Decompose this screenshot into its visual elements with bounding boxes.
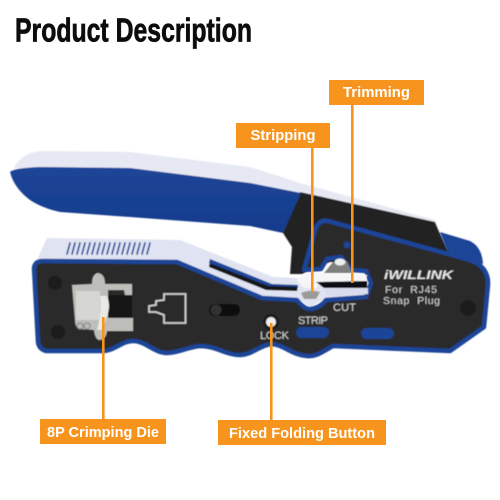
rear tool edge (440, 232, 483, 264)
small blue dot on head (344, 242, 350, 248)
body white top surface (36, 238, 367, 307)
callout line: folding button (270, 323, 273, 420)
cutter insert (324, 261, 352, 273)
sliding switch (209, 304, 240, 316)
label: Trimming (329, 80, 424, 105)
upper handle top surface (14, 151, 440, 232)
blue buttons (296, 327, 329, 338)
tool printed labels: For RJ45 (385, 284, 437, 296)
tool printed labels: iWILLINK (384, 268, 455, 282)
jaw white blade (296, 273, 367, 288)
upper handle black head (283, 192, 470, 274)
label: 8P Crimping Die (40, 419, 166, 444)
tool printed labels: LOCK (260, 330, 290, 342)
lock button (263, 314, 279, 330)
tool printed labels: STRIP (298, 315, 328, 327)
tool printed labels: Snap Plug (383, 295, 440, 307)
callout line: stripping (311, 148, 314, 292)
label: Stripping: Stripping (250, 127, 316, 144)
label: Fixed Folding Button: Fixed Folding Button (229, 425, 375, 442)
8P crimping die (72, 273, 133, 340)
slot blue edge (209, 259, 298, 287)
label: 8P Crimping Die: 8P Crimping Die (47, 424, 159, 441)
slot on body (209, 260, 298, 291)
crimping tool (10, 151, 488, 356)
body black face with blue outline (34, 221, 488, 356)
label: Stripping (236, 123, 330, 148)
label: Trimming: Trimming (343, 84, 410, 101)
lower jaw lavender (324, 288, 368, 296)
strip pocket (301, 291, 320, 299)
vent slits (67, 243, 150, 254)
label: Fixed Folding Button (218, 420, 386, 445)
slider knob (210, 304, 222, 316)
cutter pin (334, 258, 346, 266)
screws (48, 276, 62, 290)
title: Product Description (15, 12, 252, 48)
jaw dark channel (316, 281, 367, 288)
callout line: crimping die (102, 317, 105, 419)
tool printed labels: CUT (333, 302, 356, 314)
RJ45 port icon (149, 294, 186, 323)
upper handle blue grip (10, 167, 301, 233)
callout line: trimming (351, 105, 354, 283)
tool printed labels (260, 268, 455, 342)
